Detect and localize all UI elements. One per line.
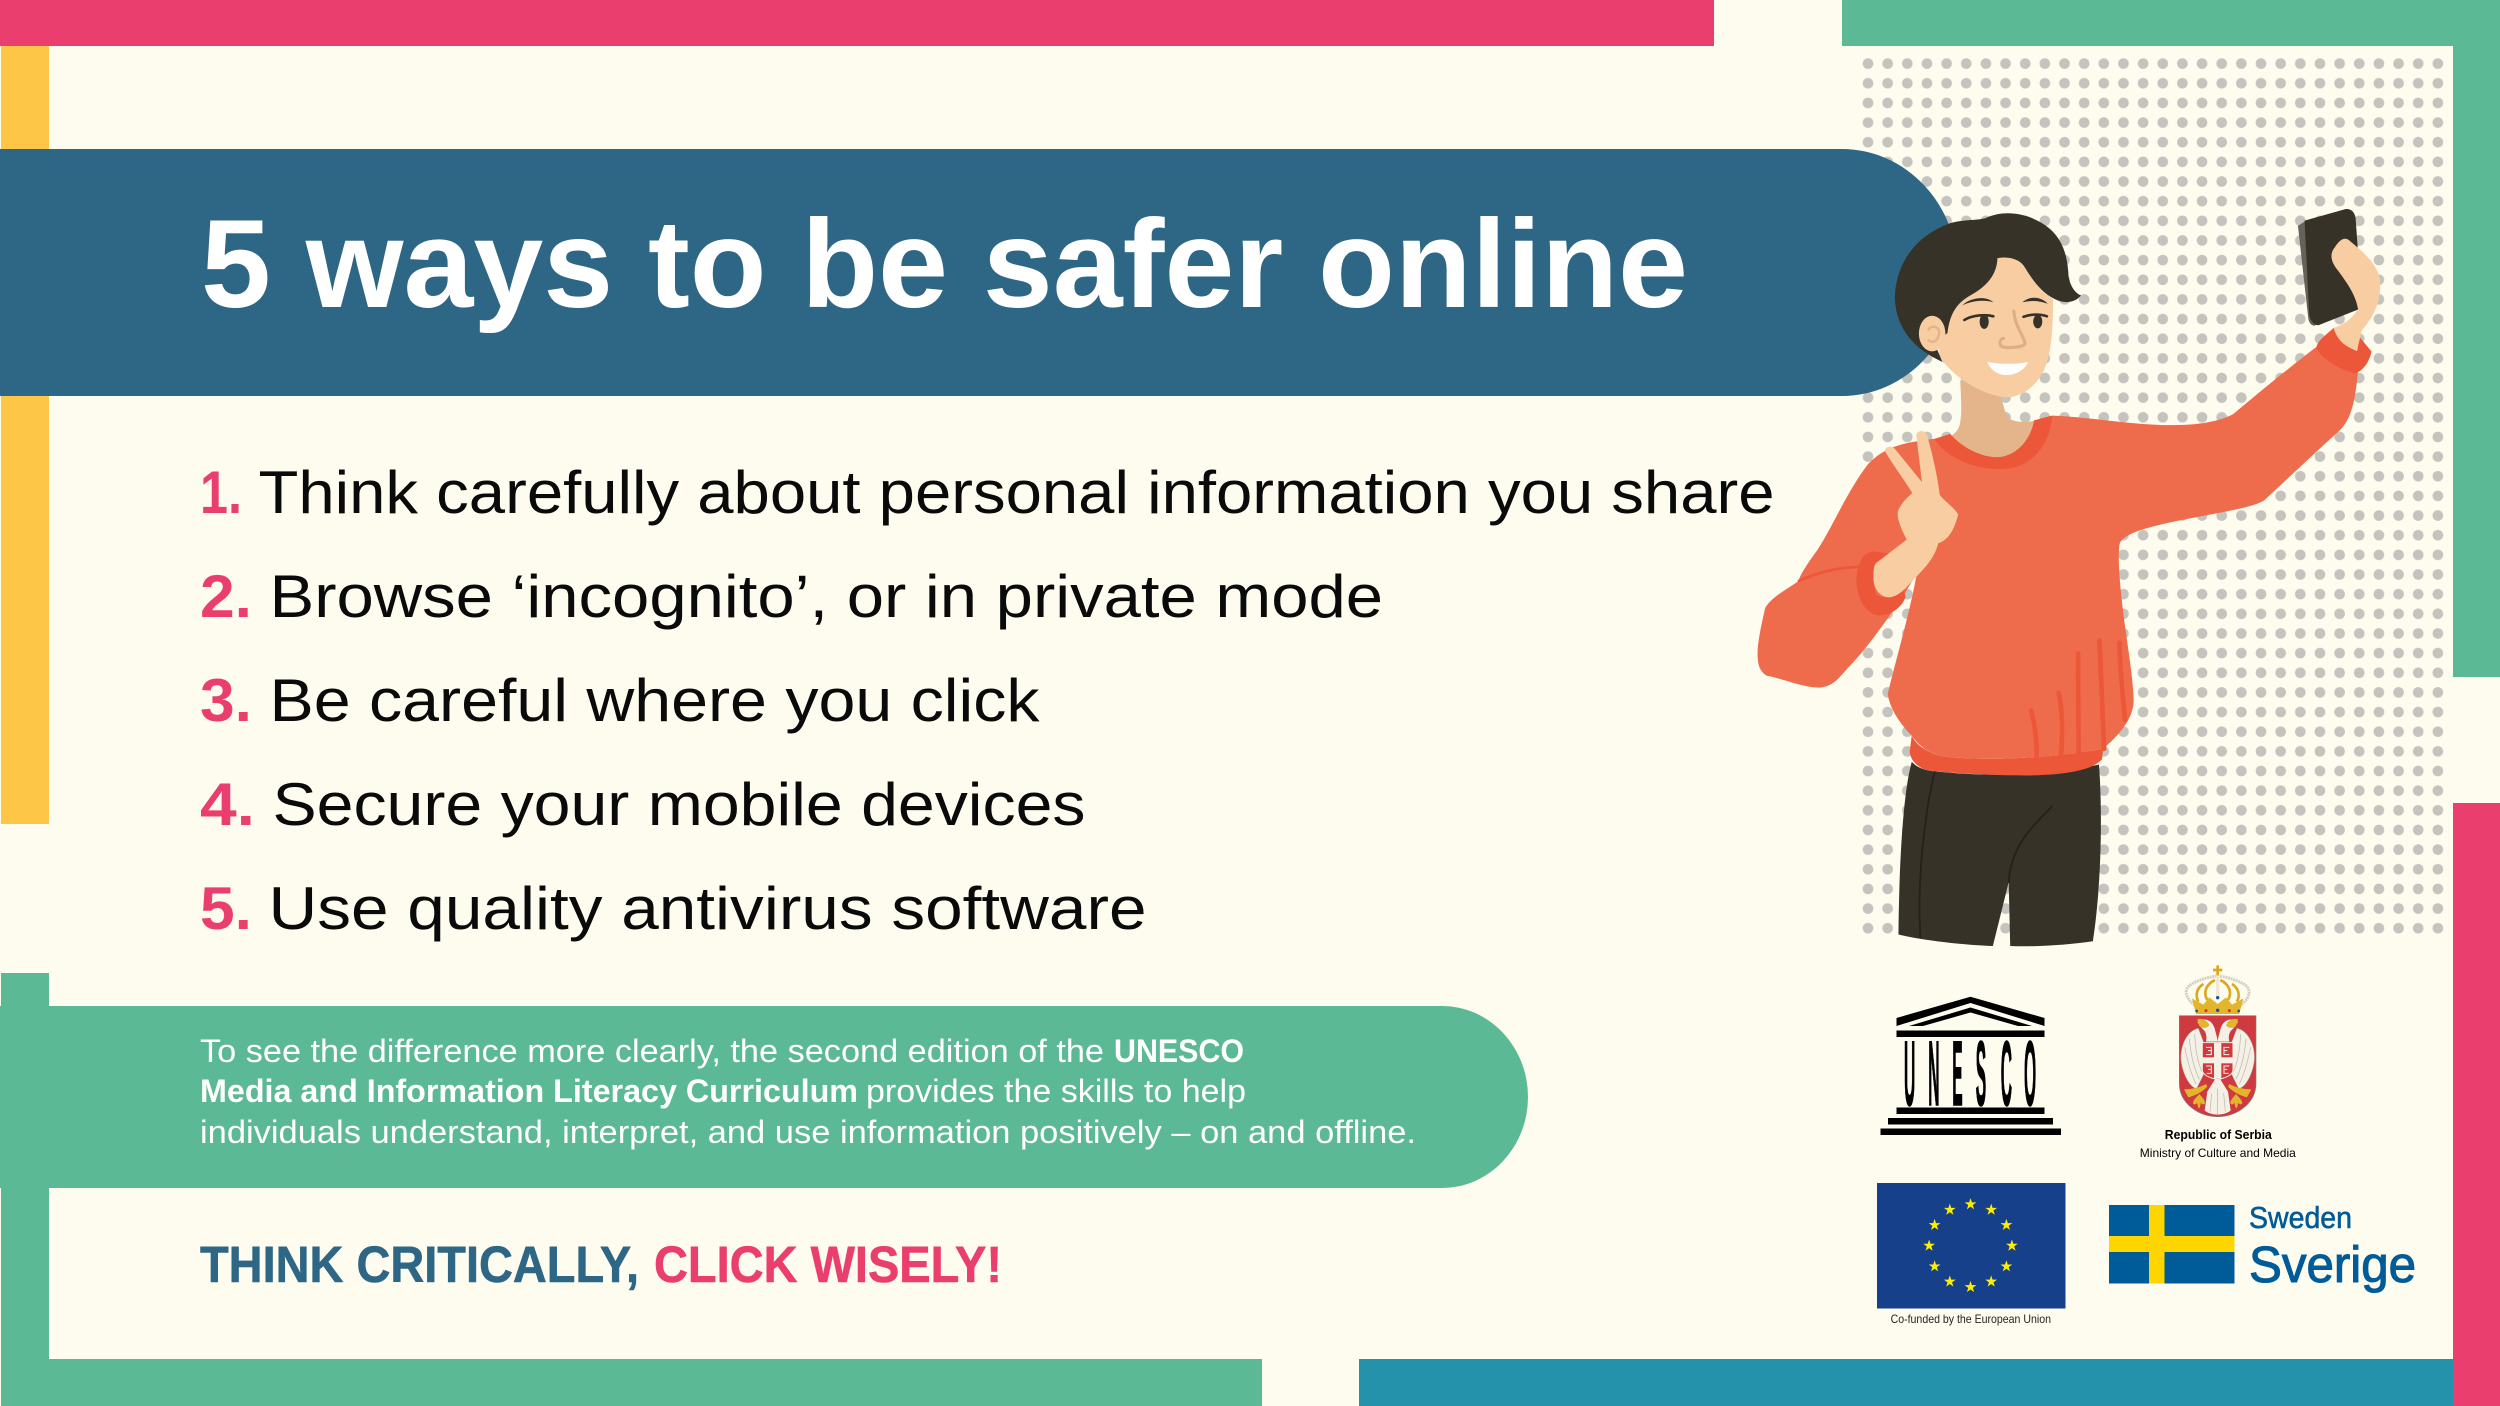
tip 3: 3. (200, 667, 252, 734)
UNESCO logo (1880, 997, 2061, 1135)
Sweden logo (2109, 1200, 2416, 1293)
title text: 5 ways to be safer online (201, 195, 1688, 334)
tip 5: 5. (200, 875, 252, 942)
tip 3: Be careful where you click (270, 667, 1041, 734)
Republic of Serbia emblem and caption (2140, 965, 2296, 1160)
left hand peace sign (1873, 431, 1958, 597)
dotted background pattern (1858, 54, 2448, 938)
neck (1945, 380, 2039, 469)
numbered list of five tips (200, 459, 1774, 942)
bottom-left green border (1, 973, 1262, 1406)
information text: To see the difference more clearly, the second edition of the (200, 1033, 1104, 1069)
Republic of Serbia emblem and caption: Ministry of Culture and Media (2140, 1146, 2296, 1160)
EU flag and caption (1877, 1183, 2066, 1326)
information text: UNESCO (1114, 1033, 1244, 1069)
head (1895, 213, 2081, 397)
title banner (0, 149, 1958, 396)
illustration: person taking a selfie (1758, 209, 2380, 946)
Serbia caption: Republic of Serbia (2165, 1127, 2273, 1142)
right pink border (2453, 803, 2500, 1406)
tip 4: Secure your mobile devices (272, 771, 1086, 838)
tip 2: 2. (200, 563, 252, 630)
coat of arms (2179, 965, 2256, 1117)
tagline: THINK CRITICALLY, (200, 1236, 639, 1293)
UNESCO logo: UNESCO (1904, 1021, 2036, 1125)
bottom teal border (1359, 1359, 2453, 1406)
tagline (200, 1236, 1002, 1293)
sweater (1758, 328, 2371, 776)
tip 1: Think carefully about personal information you share (258, 459, 1774, 526)
top pink border (0, 0, 1714, 46)
Sweden logo: Sweden (2249, 1200, 2352, 1235)
information text: individuals understand, interpret, and use information positively – on and offline. (200, 1114, 1416, 1150)
green information banner (0, 1006, 1528, 1188)
top-right green border (1842, 0, 2500, 677)
tip 1: 1. (200, 459, 242, 526)
tip 4: 4. (200, 771, 255, 838)
information text: provides the skills to help (866, 1073, 1246, 1109)
phone (2298, 209, 2360, 326)
tip 2: Browse ‘incognito’, or in private mode (270, 563, 1383, 630)
tip 5: Use quality antivirus software (268, 875, 1146, 942)
right hand holding phone (2331, 239, 2380, 350)
EU flag and caption: Co-funded by the European Union (1891, 1312, 2051, 1326)
Sweden logo: Sverige (2249, 1236, 2416, 1293)
information text: Media and Information Literacy Curriculum (200, 1073, 858, 1109)
information text (200, 1033, 1416, 1150)
left yellow border (1, 46, 49, 824)
pants (1898, 762, 2101, 946)
tagline: CLICK WISELY! (654, 1236, 1002, 1293)
